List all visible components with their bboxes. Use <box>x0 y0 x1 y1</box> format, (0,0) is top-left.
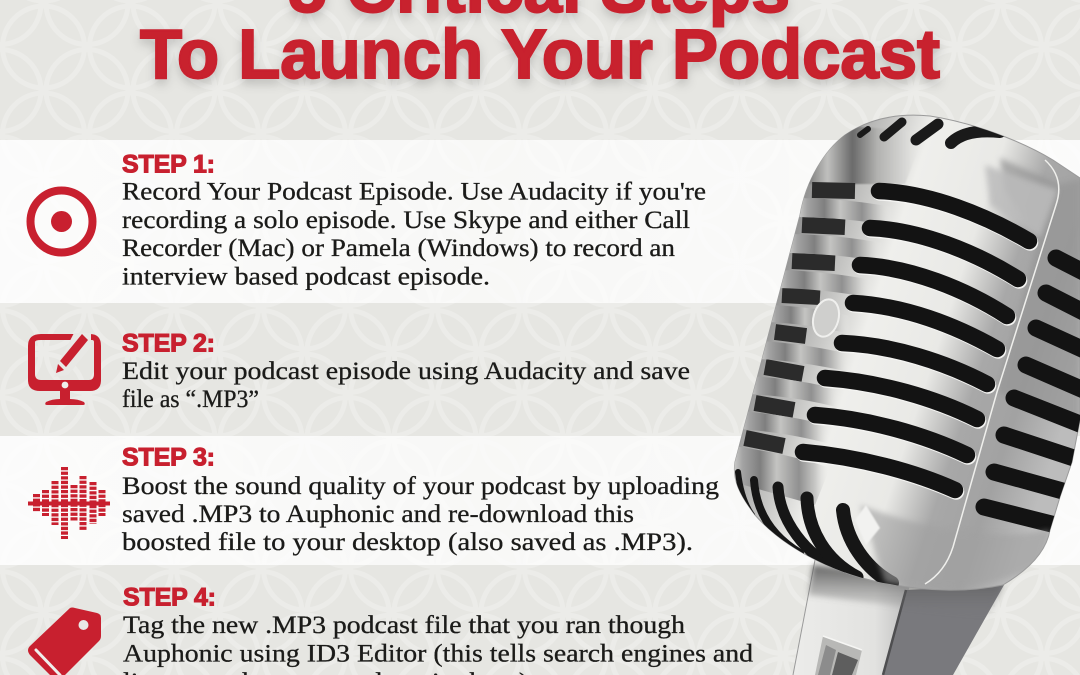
mic bottom slots <box>738 472 892 583</box>
text: step 3 description: Boost the sound quality of your podcast by uploading <box>122 473 720 500</box>
text: step 1 description: interview based podcast episode. <box>122 264 490 290</box>
text: step 2 description: Edit your podcast episode using Audacity and save <box>122 358 690 385</box>
icon: monitor with pencil <box>28 333 101 405</box>
text: step 4 description: Tag the new .MP3 podcast file that you ran though <box>123 612 686 639</box>
icon: sound waveform <box>28 467 110 539</box>
mic lower shadow <box>860 505 1050 588</box>
icon: tag <box>28 608 101 675</box>
panel: step 3 band <box>0 436 1080 565</box>
mic right slots <box>984 258 1080 535</box>
heading: step 3: STEP 3: <box>122 444 215 472</box>
mic neck <box>793 560 1004 675</box>
mic slot highlights <box>804 192 1030 492</box>
mic top slots <box>860 122 1000 143</box>
mic button <box>809 296 843 340</box>
heading: step 2: STEP 2: <box>122 330 215 358</box>
mic chrome ribs <box>733 198 892 505</box>
text: step 3 description: saved .MP3 to Auphonic and re-download this <box>122 501 634 528</box>
text: step 1 description: Recorder (Mac) or Pamela (Windows) to record an <box>122 235 676 262</box>
heading: step 4: STEP 4: <box>123 584 216 612</box>
text: step 3 description: boosted file to your desktop (also saved as .MP3). <box>122 529 693 556</box>
mic seam line <box>925 160 1059 584</box>
text: step 1 description: recording a solo episode. Use Skype and either Call <box>122 207 690 234</box>
mic head body <box>734 115 1080 590</box>
title: To Launch Your Podcast <box>140 15 940 93</box>
mic main slots left panel <box>803 191 1029 490</box>
icon: record target <box>30 190 92 252</box>
mic upper right shading <box>997 158 1080 420</box>
text: step 1 description: Record Your Podcast Episode. Use Audacity if you're <box>122 178 706 206</box>
mic crown chrome <box>809 126 910 185</box>
microphone illustration <box>733 115 1080 675</box>
panel: step 1 band <box>0 140 1080 303</box>
text: step 4 description <box>123 612 754 675</box>
mic left grille parts <box>745 190 855 446</box>
text: step 2 description <box>122 358 690 413</box>
text: step 1 description <box>122 178 706 290</box>
text: step 2 description: file as “.MP3” <box>122 386 259 413</box>
heading: step 1: STEP 1: <box>122 150 215 178</box>
text: step 4 description: Auphonic using ID3 Editor (this tells search engines and <box>123 640 754 668</box>
mic clasp <box>815 636 862 675</box>
text: step 3 description <box>122 473 720 556</box>
